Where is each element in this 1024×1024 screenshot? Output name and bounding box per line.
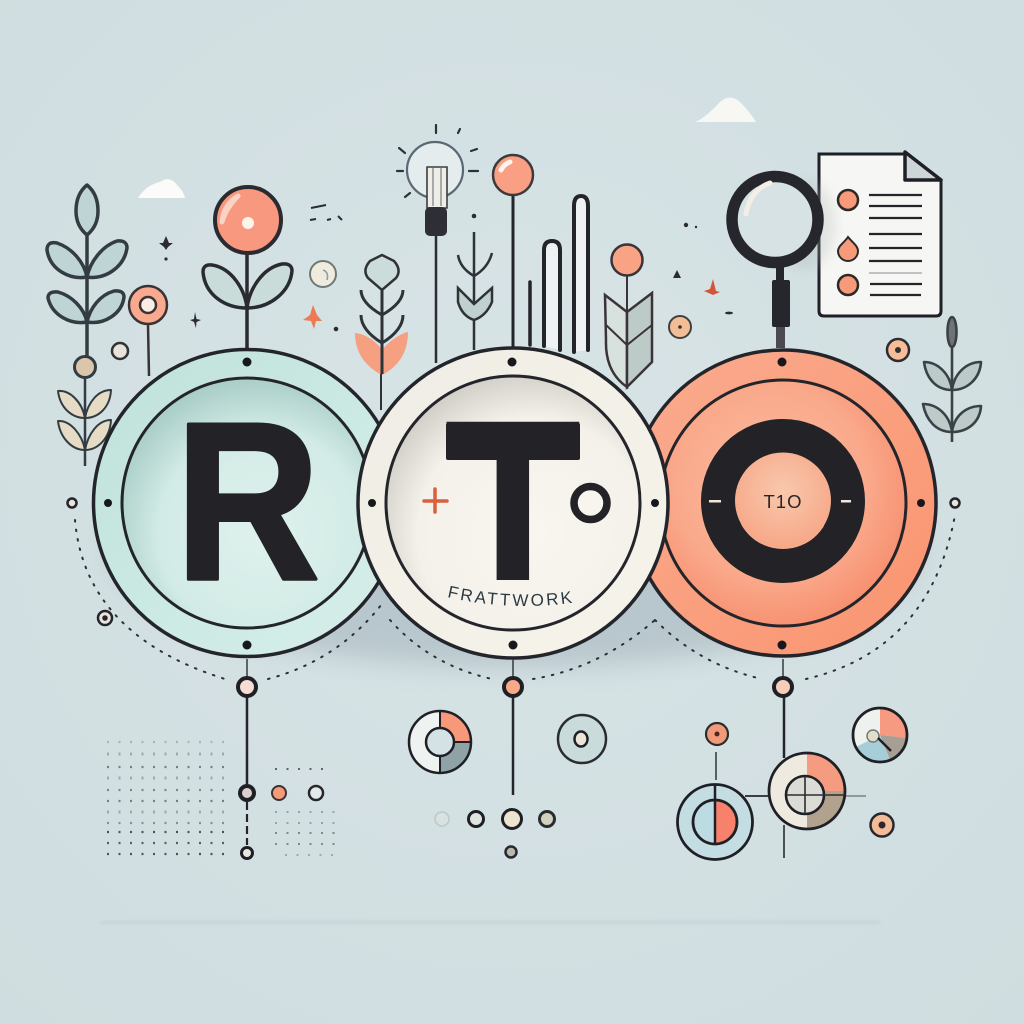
cloud right <box>695 97 756 122</box>
letter T: T <box>444 373 582 629</box>
quadrant chart <box>769 753 845 829</box>
small o ring <box>574 486 607 520</box>
ground line <box>100 921 880 924</box>
red plus <box>424 489 447 512</box>
small peach dot <box>669 316 691 338</box>
flower: coral stem <box>493 155 533 348</box>
orange marker <box>704 279 720 295</box>
magnifying glass <box>732 176 818 348</box>
bar pills <box>530 196 588 352</box>
orange star <box>303 305 322 329</box>
ring chart <box>558 715 606 763</box>
framework label: FRATTWORK <box>448 586 572 606</box>
pie chart: donut <box>409 711 471 773</box>
soft shadow under circles <box>110 432 920 668</box>
small peach dot lower right <box>870 814 894 836</box>
dot grid right <box>275 769 335 855</box>
dot grid left <box>107 742 226 854</box>
circle O <box>630 350 936 656</box>
small pearl <box>310 261 336 287</box>
plant: chevron leaves with orange base <box>355 255 408 410</box>
small peach dot right <box>887 339 909 361</box>
O center label: T1O <box>764 491 802 512</box>
circle T <box>356 346 670 660</box>
plant: far right <box>923 317 981 442</box>
target chart <box>678 784 752 860</box>
sparkles right <box>673 223 733 314</box>
connector O <box>745 659 866 858</box>
small ring <box>112 343 128 359</box>
connector T <box>435 659 554 858</box>
flower with shield leaf <box>605 244 652 387</box>
cloud left <box>138 179 185 198</box>
plant: narrow chevron <box>458 232 492 350</box>
circle R <box>94 350 400 656</box>
O center <box>735 452 831 548</box>
small coral node <box>706 723 728 780</box>
lightbulb <box>397 125 478 363</box>
clock pie <box>853 708 907 762</box>
sparkles left <box>159 205 342 331</box>
T crossbar weight <box>446 423 580 460</box>
connector R <box>238 659 323 858</box>
flower: large coral <box>203 187 292 348</box>
edge rings <box>68 498 960 625</box>
plant: far left <box>47 185 127 466</box>
letter O: O <box>697 380 869 626</box>
dot by plant <box>472 214 476 218</box>
small pin flower <box>129 286 167 376</box>
O ring <box>718 436 848 566</box>
letter R: R <box>175 376 320 628</box>
dotted arcs <box>75 515 955 679</box>
document <box>775 152 941 316</box>
